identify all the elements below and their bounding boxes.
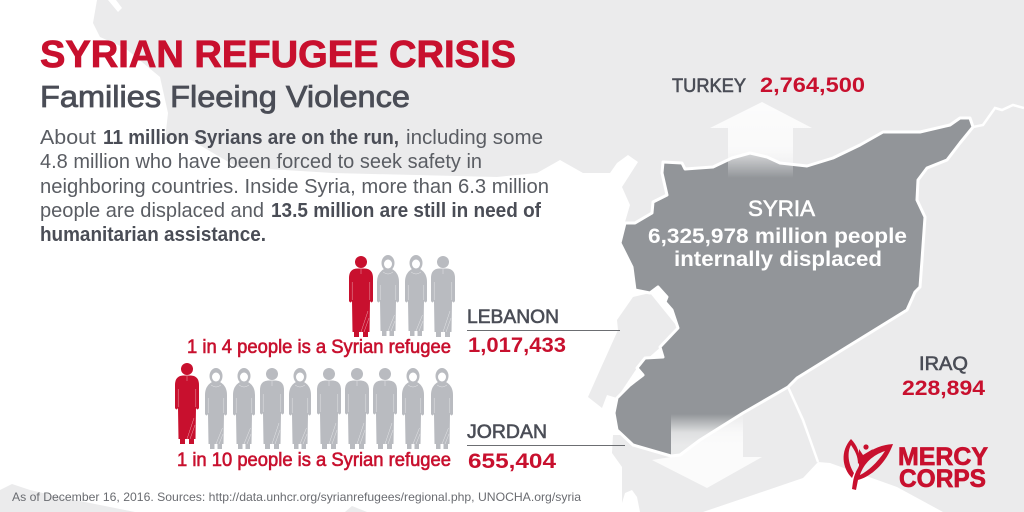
label: Jordan: 655,404: [468, 450, 556, 473]
logo: Mercy Corps: [844, 439, 988, 493]
logo: Mercy Corps: MERCY: [898, 443, 988, 471]
title: SYRIAN REFUGEE CRISIS: [40, 34, 516, 76]
intro text block: 13.5 million are still in need of: [271, 200, 541, 222]
label: Lebanon: LEBANON: [467, 307, 559, 328]
pictogram: Lebanon 1 in 4: [349, 255, 455, 337]
intro text block: 4.8 million who have been forced to seek safety in: [40, 151, 482, 173]
footer source note: As of December 16, 2016. Sources: http://data.unhcr.org/syrianrefugees/regional.php, UNOCHA.org/syria: [12, 490, 581, 504]
label: Turkey: 2,764,500: [760, 74, 865, 97]
label: Jordan: [467, 422, 625, 473]
label: Iraq: [902, 354, 985, 400]
logo: Mercy Corps: CORPS: [899, 465, 986, 493]
label: Turkey: [672, 74, 865, 97]
arrow: to Turkey: [710, 102, 812, 178]
map: Syria: [614, 118, 973, 456]
label: Turkey: TURKEY: [672, 75, 746, 97]
white border lines: [788, 105, 1024, 462]
label: Lebanon: 1,017,433: [468, 334, 566, 357]
subtitle: Families Fleeing Violence: [40, 79, 410, 114]
intro text block: 11 million Syrians are on the run,: [103, 127, 399, 149]
label: Iraq: IRAQ: [919, 354, 968, 375]
intro text block: About: [40, 127, 96, 149]
intro text block: including some: [406, 127, 543, 149]
label: Jordan: JORDAN: [467, 422, 547, 443]
pictogram: Jordan 1 in 10: [175, 363, 453, 449]
intro text block: [40, 127, 549, 246]
intro text block: people are displaced and: [40, 200, 264, 222]
label: Lebanon: [467, 307, 620, 357]
arrow: to Jordan: [652, 414, 762, 488]
label: Syria: SYRIA: [748, 196, 815, 221]
caption: Jordan ratio: 1 in 10 people is a Syrian refugee: [177, 450, 451, 471]
intro text block: humanitarian assistance.: [40, 224, 266, 246]
label: Syria: [648, 196, 907, 271]
label: Iraq: 228,894: [902, 377, 985, 400]
label: Syria: 6,325,978 million people: [648, 225, 907, 248]
intro text block: neighboring countries. Inside Syria, more than 6.3 million: [40, 176, 549, 198]
label: Syria: internally displaced: [674, 248, 882, 271]
icon: leaf and figure: [844, 439, 893, 490]
caption: Lebanon ratio: 1 in 4 people is a Syrian refugee: [187, 337, 451, 358]
